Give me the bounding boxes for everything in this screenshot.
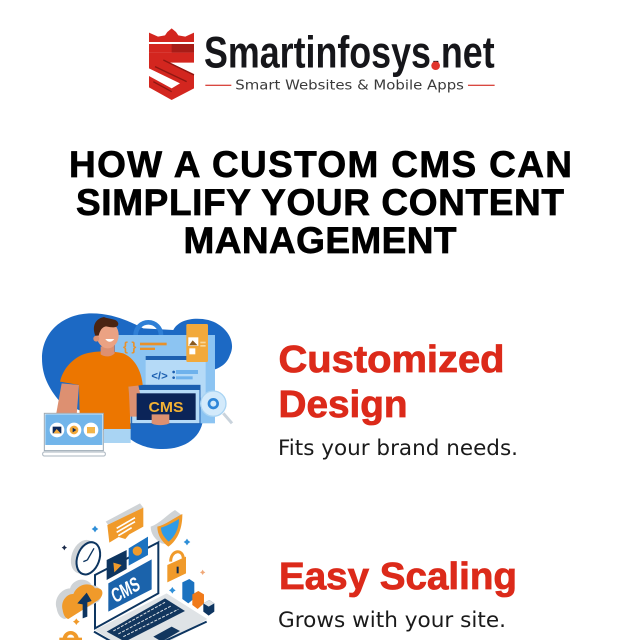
heading: Easy Scaling: Easy Scaling [279, 556, 517, 598]
pale panel under shirt [104, 429, 131, 443]
laptop [43, 413, 105, 456]
main browser window [115, 335, 215, 423]
logo red dot [431, 61, 440, 70]
laptop screen [95, 542, 158, 628]
code brace and lines [123, 340, 167, 354]
small gear [59, 631, 82, 640]
title: MANAGEMENT [184, 220, 457, 261]
man's arms [56, 383, 79, 415]
man's head and hair [93, 317, 119, 356]
title [69, 144, 572, 261]
laptop base and keyboard [94, 593, 207, 640]
text: Fits your brand needs.: Fits your brand needs. [278, 436, 518, 461]
logo wordmark: Smartinfosys.net [204, 29, 495, 78]
code brace and lines: { } [123, 340, 136, 354]
magnifier with gear [201, 391, 232, 423]
logo: Smartinfosys.net [149, 28, 495, 100]
logo tagline: Smart Websites & Mobile Apps [235, 79, 464, 94]
heading: Customized Design: Design [278, 384, 408, 426]
laptop screen: CMS [108, 573, 143, 608]
shield [151, 510, 182, 547]
sparkles [62, 526, 205, 625]
cloud upload [56, 580, 102, 619]
CMS sign [137, 393, 196, 420]
title: HOW A CUSTOM CMS CAN [69, 144, 572, 185]
illustration: isometric CMS laptop [56, 503, 214, 640]
text: Grows with your site.: Grows with your site. [278, 608, 506, 633]
video and image cards [107, 537, 148, 580]
inner code window [146, 356, 206, 398]
illustration: developer holding CMS sign [42, 313, 232, 456]
heading: Customized Design: Customized [278, 339, 504, 381]
lower dark window [132, 385, 200, 424]
heading: Customized Design [278, 339, 504, 426]
hand on sign [152, 414, 169, 425]
clock [66, 536, 104, 578]
CMS sign: CMS [148, 400, 183, 416]
speech bubble [106, 503, 143, 543]
icon: red crown and S emblem [149, 28, 194, 100]
gear behind screen [136, 322, 161, 348]
man's orange shirt [60, 351, 143, 430]
blue background blob [42, 313, 232, 449]
bar chart cubes [182, 579, 214, 616]
title: SIMPLIFY YOUR CONTENT [76, 182, 564, 223]
inner code window: </> [151, 371, 168, 383]
orange phone card [186, 324, 208, 362]
padlock [167, 552, 186, 582]
